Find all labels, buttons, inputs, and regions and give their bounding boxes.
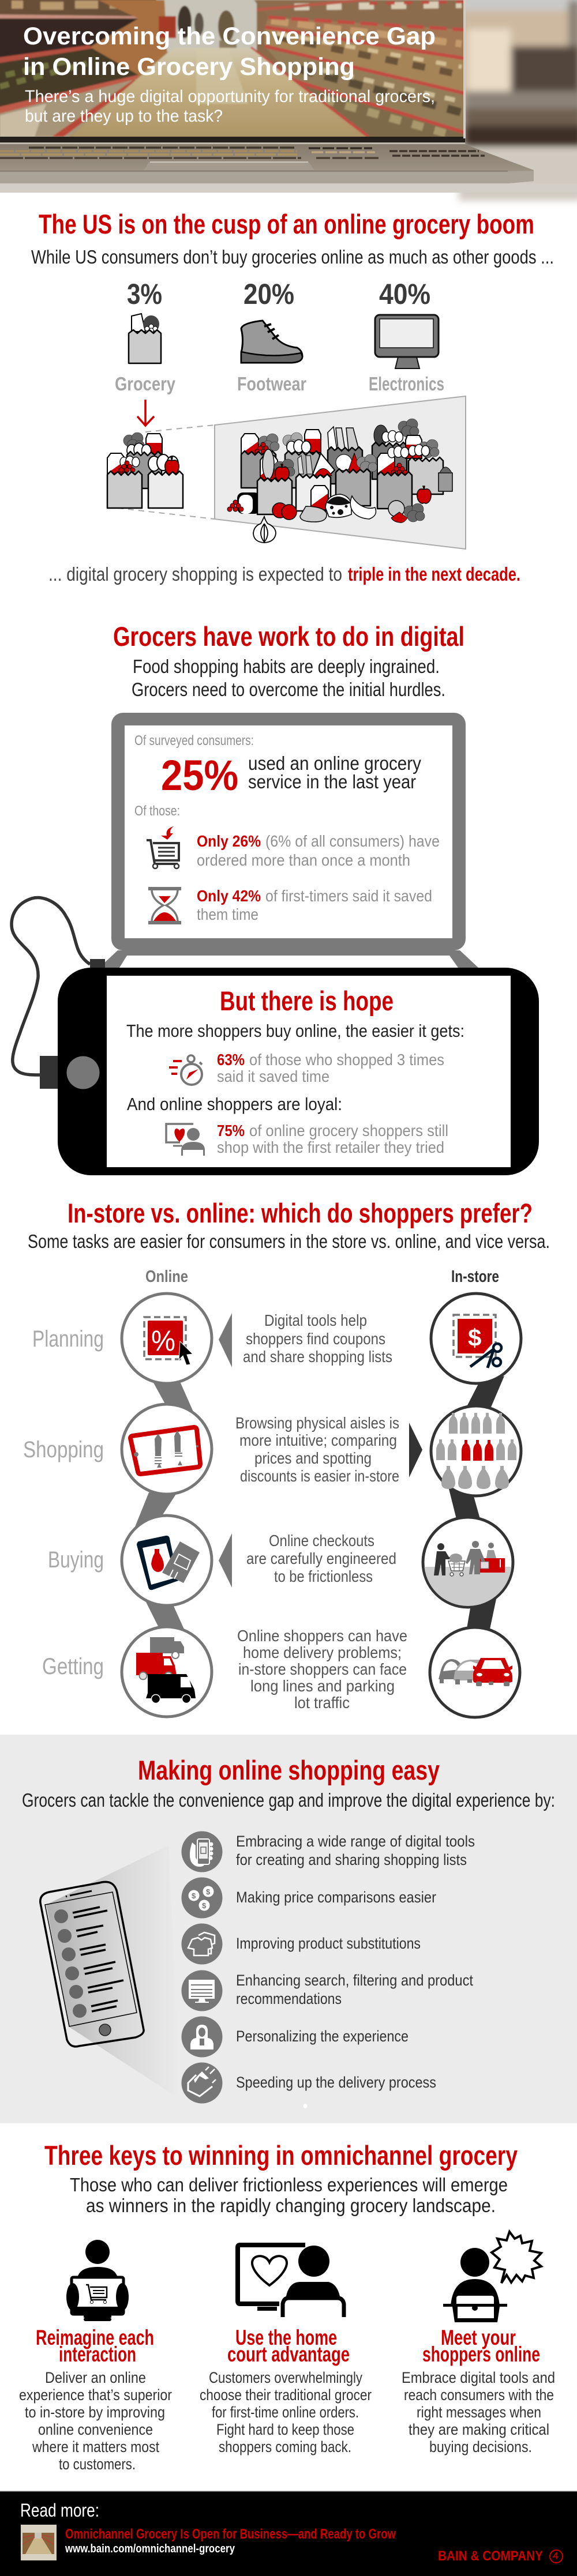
hero title [23,22,436,81]
text: only 26%: (6% of all consumers) have [265,832,440,850]
text: shopping: Browsing physical aisles is [235,1414,399,1432]
column heading [422,2326,540,2366]
text: 63%: said it saved time [217,1067,329,1085]
hero subtitle: but are they up to the task? [25,107,223,126]
column text: where it matters most [32,2438,159,2455]
column text: Deliver an online [45,2369,146,2386]
back of aisle [178,6,192,38]
text: planning: and share shopping lists [243,1348,392,1366]
arrow: points to in-store [409,1423,422,1477]
text [236,1833,475,1868]
icon: coins: $ [202,1901,207,1910]
text: only 42%: of first-timers said it saved [265,887,432,905]
text: 63%: of those who shopped 3 times [249,1051,444,1069]
intro text: as winners in the rapidly changing grocery landscape. [86,2195,496,2216]
icon: coins: $ [206,1887,211,1896]
column heading: Meet your [441,2326,516,2349]
stat: grocery 3%: Grocery [115,373,176,394]
hero title: Overcoming the Convenience Gap [23,22,436,50]
column text: shoppers coming back. [219,2438,351,2455]
text: loyal: And online shoppers are loyal: [127,1094,342,1114]
text: planning [243,1311,392,1366]
item: speeding up delivery [181,2062,436,2104]
icon: shirts [181,1924,223,1964]
stat: footwear 20% [237,278,306,394]
text: buying: are carefully engineered [246,1550,396,1567]
text: planning: shoppers find coupons [246,1330,385,1348]
column heading: Reimagine each [36,2326,154,2349]
column text: for first-time online orders. [212,2404,359,2421]
smartphone panel: but there is hope [58,968,539,1175]
column text: choose their traditional grocer [200,2386,372,2404]
text [236,1972,473,2007]
panel: making online shopping easy [0,1735,577,2123]
text: Personalizing the experience [236,2028,409,2045]
text: Making price comparisons easier [236,1889,436,1906]
stat: electronics 40% [369,278,444,394]
article link: www.bain.com/omnichannel-grocery [65,2543,235,2555]
logo: bain and company: BAIN & COMPANY [438,2548,543,2564]
stat text: used an online grocery [248,753,421,774]
text: 75%: shop with the first retailer they tried [217,1138,444,1156]
text: buying: Online checkouts [269,1532,374,1550]
stat: footwear 20%: Footwear [237,373,306,394]
column: home court advantage [200,2245,372,2455]
column text: Embrace digital tools and [402,2369,555,2386]
stat text [248,753,421,792]
text: planning: Digital tools help [264,1311,367,1329]
column heading [227,2326,350,2366]
stat: footwear 20%: 20% [243,278,294,310]
intro text [70,2174,508,2216]
text: shopping: more intuitive; comparing [239,1431,397,1449]
intro text: Food shopping habits are deeply ingrained. [133,656,440,677]
text: Improving product substitutions [236,1935,421,1952]
icon: stopwatch [169,1055,202,1085]
arrow: points to online [219,1533,232,1588]
icon: coins: $ [192,1891,196,1900]
column heading: court advantage [227,2342,350,2366]
stat: grocery 3%: 3% [127,278,162,310]
online circle: coupon with cursor [122,1293,212,1383]
icon: boot [241,321,302,363]
large bag pile [227,419,452,522]
hero subtitle [25,87,435,126]
text: 75%: 75% [217,1122,245,1140]
text: getting: home delivery problems; [243,1644,402,1661]
text: Speeding up the delivery process [236,2074,436,2091]
in-store circle: checkout line [423,1517,513,1607]
column heading: interaction [59,2342,136,2366]
text: getting: lot traffic [294,1694,350,1712]
charging cable [12,898,105,1089]
text: Embracing a wide range of digital tools [236,1833,475,1850]
text: getting: long lines and parking [250,1677,395,1695]
online circle: delivery trucks [122,1627,212,1717]
heading: grocers have work to do: Grocers have work to do in digital [113,621,464,652]
icon: grocery bag [129,314,161,363]
stage label: buying: Buying [48,1547,104,1573]
right shelves [254,0,467,30]
floor [68,48,368,138]
stat: 25%: 25% [161,751,238,799]
text: for creating and sharing shopping lists [236,1851,467,1868]
column header: in-store: In-store [451,1268,499,1286]
text: 63%: 63% [217,1051,245,1069]
column text: online convenience [38,2421,153,2438]
in-store circle: paper coupon with scissors [431,1293,521,1383]
row: buying [48,1515,513,1607]
icon: person [181,2016,223,2058]
stage label: shopping: Shopping [23,1437,104,1462]
online circle: tablet [122,1404,212,1494]
text: only 26% [197,832,440,869]
text: only 42% [197,887,432,923]
column text [402,2369,555,2455]
text: getting [237,1627,407,1712]
footer: read more [0,2491,577,2576]
column text: Fight hard to keep those [216,2421,354,2438]
icon: hourglass [148,887,181,924]
icon: monitor [375,315,439,368]
illustration: phone with list and beam [40,1845,180,2099]
in-store circle: shelves of bottles [431,1406,521,1496]
item: personalizing [181,2016,409,2058]
stage label: getting: Getting [42,1654,104,1679]
onion [253,517,276,543]
thumbnail: report cover [21,2525,57,2560]
online column connectors [134,1382,193,1629]
row: shopping [23,1404,521,1496]
hero subtitle: There’s a huge digital opportunity for traditional grocers, [25,87,435,106]
icon: monitor with listing [181,1970,223,2011]
icon: hand holding phone [181,1832,223,1872]
column text: buying decisions. [429,2438,532,2455]
column text: right messages when [417,2404,541,2421]
heading: but there is hope: But there is hope [220,986,394,1016]
intro text: Grocers need to overcome the initial hurdles. [132,679,445,700]
closing statement: triple in the next decade: triple in the next decade. [348,563,520,585]
stage label: planning: Planning [32,1326,104,1352]
row: getting [42,1627,520,1717]
laptop frame [99,713,478,968]
column text [200,2369,372,2455]
icon: person at laptop with speech burst [443,2232,541,2322]
column text: to customers. [59,2455,136,2473]
text: Enhancing search, filtering and product [236,1972,473,1989]
intro text: Those who can deliver frictionless experiences will emerge [70,2174,508,2195]
text: shopping: discounts is easier in-store [240,1467,399,1485]
heading: Making online shopping easy [138,1755,440,1785]
intro text [132,656,445,700]
column text: to in-store by improving [25,2404,165,2421]
column heading: Use the home [235,2326,337,2349]
icon: heart monitor and person [166,1124,205,1156]
text: shopping: prices and spotting [254,1449,372,1467]
in-store column connectors [448,1376,504,1629]
text: getting: Online shoppers can have [237,1627,407,1645]
icon: shopping cart [147,826,179,868]
item: digital tools [181,1832,475,1872]
column: reimagine each interaction [19,2240,172,2473]
icon: person at monitor with heart [238,2245,344,2321]
left shelves [0,0,159,17]
item: search and filtering [181,1970,473,2011]
zoom panel with many grocery bags [107,396,466,549]
of those label: Of those: [134,803,180,819]
survey label: Of surveyed consumers: [134,733,254,749]
text: 63% [217,1051,444,1085]
text: 75%: of online grocery shoppers still [249,1122,448,1140]
column text: they are making critical [409,2421,549,2438]
column header: online: Online [145,1268,188,1286]
online circle: coupon with cursor: % [151,1325,175,1357]
text: getting: in-store shoppers can face [238,1660,407,1678]
in-store circle: cars in traffic [430,1627,520,1717]
arrow: points to online [219,1313,232,1367]
text: recommendations [236,1990,342,2007]
stat: electronics 40%: Electronics [369,373,444,394]
text: buying: to be frictionless [274,1567,373,1585]
item: substitutions [181,1924,421,1964]
item: price comparisons [181,1878,436,1918]
stat text: service in the last year [248,771,416,792]
hero title: in Online Grocery Shopping [23,53,355,81]
column heading [36,2326,154,2366]
icon: person holding monitor with cart [66,2240,129,2321]
column text: reach consumers with the [404,2386,554,2404]
online circle: phone and card [122,1515,212,1605]
icon: coins [181,1878,223,1918]
stat: grocery 3% [115,278,176,394]
closing statement: triple in the next decade: ... digital grocery shopping is expected to [48,563,342,585]
small bag group [107,433,183,508]
arrow: grocery down to bags [137,400,154,426]
column text: Customers overwhelmingly [209,2369,362,2386]
text: only 42%: them time [197,905,258,923]
text: 75% [217,1122,448,1156]
text: only 42%: Only 42% [197,887,261,905]
article title: Omnichannel Grocery Is Open for Business—and Ready to Grow [65,2526,396,2542]
read more label: Read more: [20,2500,99,2521]
hero: laptop on desk showing grocery aisle photo [0,0,577,201]
text: more shoppers: The more shoppers buy online, the easier it gets: [126,1021,464,1041]
column text: experience that’s superior [19,2386,172,2404]
icon: fast parcel [181,2062,223,2104]
text: buying [246,1532,396,1585]
text: only 26%: ordered more than once a month [197,851,410,869]
row: planning [32,1293,521,1383]
column: meet your shoppers online [402,2232,555,2455]
text: only 26%: Only 26% [197,832,261,850]
in-store circle: paper coupon with scissors: $ [468,1324,481,1351]
column text [19,2369,172,2473]
text: shopping [235,1414,399,1485]
stat: electronics 40%: 40% [379,278,430,310]
